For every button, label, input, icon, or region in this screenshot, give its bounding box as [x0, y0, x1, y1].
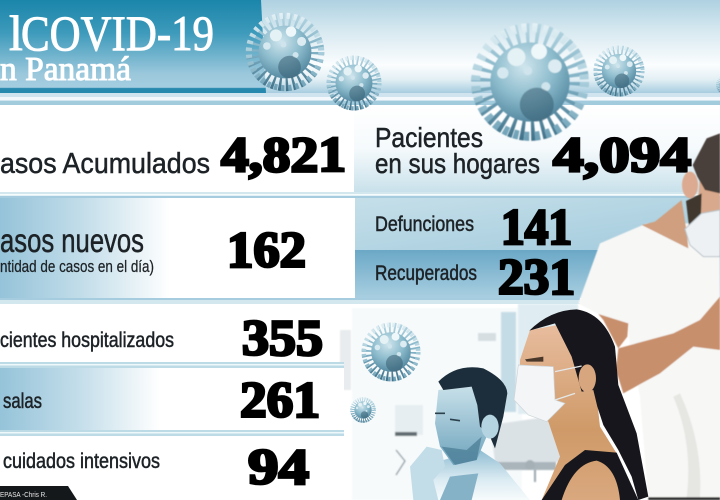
label: pacientes en sus hogares: Pacientes: [375, 122, 483, 153]
casos nuevos gradient: [0, 198, 170, 298]
label: en salas: salas: [3, 390, 42, 413]
number: cuidados intensivos: 94: [248, 440, 309, 496]
label: recuperados: Recuperados: [375, 262, 477, 285]
label: pacientes hospitalizados: cientes hospitalizados: [0, 329, 174, 352]
header title banner: [0, 0, 266, 93]
panel: lower white background: [0, 298, 720, 500]
row 3 separator: [0, 298, 580, 304]
panel: casos nuevos: [0, 198, 354, 298]
row separators: [0, 192, 720, 198]
icon: virus top left: [249, 16, 321, 88]
man coughing: [410, 367, 530, 500]
number: casos nuevos: 162: [227, 223, 306, 279]
panel: en salas background: [0, 368, 344, 430]
number: salas: 261: [240, 373, 320, 429]
icon: virus edge: [717, 76, 720, 94]
note: cantidad de casos: ntidad de casos en el día): [0, 257, 154, 276]
number: recuperados: 231: [498, 250, 575, 306]
woman with mask: [514, 309, 648, 500]
panel: defunciones: [355, 198, 720, 250]
footer credit: [0, 486, 77, 500]
panel: recuperados: [355, 250, 720, 298]
hospital photo background: [340, 304, 578, 500]
salas left tint: [0, 368, 160, 430]
label: pacientes en sus hogares: en sus hogares: [375, 148, 540, 179]
number: pacientes en hogares: 4,094: [553, 126, 691, 182]
footer credit: EPASA -Chris R.: [0, 490, 47, 499]
number: casos acumulados: 4,821: [221, 126, 346, 182]
row lines: [0, 362, 344, 436]
number: hospitalizados: 355: [242, 311, 323, 367]
label: defunciones: Defunciones: [375, 213, 474, 236]
man with white shirt: [578, 133, 720, 500]
title: COVID-19: [21, 5, 214, 61]
icon: virus in ward: [364, 325, 418, 379]
icon: virus medium: [329, 58, 379, 108]
panel: casos acumulados and pacientes en hogares: [0, 105, 720, 192]
icon: virus large: [476, 28, 584, 136]
subtitle: n Panamá: [0, 51, 131, 88]
icon: virus small ward: [351, 398, 375, 422]
title: l: [9, 5, 23, 61]
separator bands under header: [0, 93, 720, 105]
label: cuidados intensivos: cuidados intensivos: [3, 450, 160, 473]
number: defunciones: 141: [501, 200, 572, 256]
icon: virus small right: [595, 47, 643, 95]
label: casos acumulados: asos Acumulados: [0, 148, 210, 180]
sky background: [0, 0, 720, 93]
label: casos nuevos: asos nuevos: [0, 222, 144, 259]
